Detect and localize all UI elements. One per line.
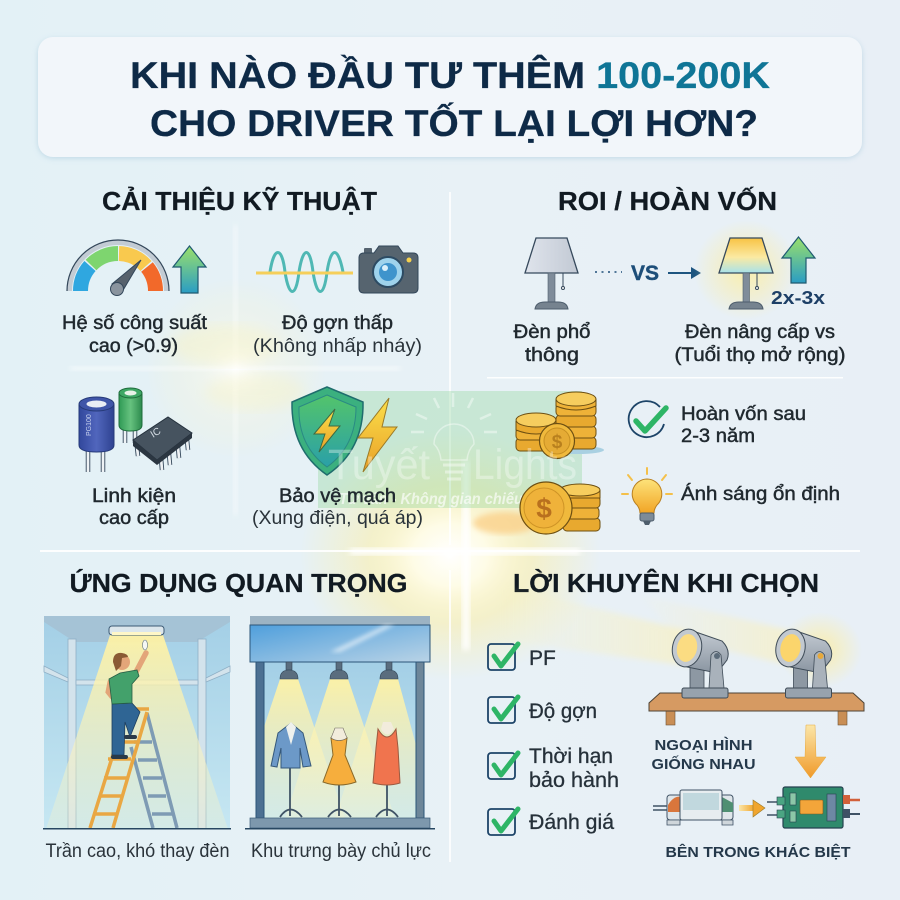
icon: coin stacks: $ xyxy=(552,432,563,453)
track lights xyxy=(280,662,398,679)
label: standard lamp: Đèn phổ xyxy=(514,322,590,343)
spotlight 2 xyxy=(772,626,832,698)
label: circuit protection: (Xung điện, quá áp) xyxy=(252,508,423,529)
text: payback: Hoàn vốn sau xyxy=(681,404,806,425)
icon: electronic components xyxy=(79,388,192,472)
title text: KHI NÀO ĐẦU TƯ THÊM 100-200K xyxy=(130,54,770,96)
icon: coin stacks xyxy=(516,392,604,458)
heading: LỜI KHUYÊN KHI CHỌN xyxy=(513,568,819,598)
title text xyxy=(130,54,770,144)
light glow: upper left cross xyxy=(70,225,400,515)
label: circuit protection xyxy=(252,486,423,529)
label: upgraded lamp: (Tuổi thọ mở rộng) xyxy=(674,345,846,366)
check: warranty: bảo hành xyxy=(529,769,619,792)
arrow: right xyxy=(739,800,765,817)
check: reviews: Đánh giá xyxy=(529,811,614,834)
mannequins xyxy=(271,722,400,817)
panel: ROI xyxy=(487,186,846,534)
heading: ROI / HOÀN VỐN xyxy=(558,186,777,216)
check: PF xyxy=(488,644,556,670)
icon: upgraded lamp xyxy=(694,220,798,320)
panel: cải thiện kỹ thuật xyxy=(62,186,423,529)
text: stable light: Ánh sáng ổn định xyxy=(681,484,840,505)
icon: light bulb xyxy=(622,468,672,525)
watermark logo: Tuyết xyxy=(328,441,430,489)
label: same appearance: NGOẠI HÌNH xyxy=(654,737,752,754)
label: power factor: Hệ số công suất xyxy=(62,313,208,334)
label: different inside: BÊN TRONG KHÁC BIỆT xyxy=(666,843,850,861)
label: components xyxy=(92,486,176,529)
person xyxy=(108,640,148,759)
heading: CẢI THIỆU KỸ THUẬT xyxy=(102,186,377,216)
label: same appearance: GIỐNG NHAU xyxy=(652,755,756,773)
illustration: high ceiling xyxy=(43,616,231,830)
heading: ỨNG DỤNG QUAN TRỌNG xyxy=(70,568,408,598)
caption: high ceiling: Trần cao, khó thay đèn xyxy=(46,841,230,862)
vs arrow: VS xyxy=(631,262,659,285)
spotlight 1 xyxy=(669,626,728,698)
label: upgraded lamp: Đèn nâng cấp vs xyxy=(685,322,835,343)
text: payback: 2-3 năm xyxy=(681,426,755,447)
icon: standard lamp xyxy=(525,238,578,309)
label: low ripple xyxy=(253,313,422,357)
icon: electronic components: IC xyxy=(149,426,163,441)
caption: showroom: Khu trưng bày chủ lực xyxy=(251,841,431,862)
label: components: Linh kiện xyxy=(92,486,176,507)
check: ripple xyxy=(488,697,597,723)
vs arrow xyxy=(595,262,701,285)
light glow: lower centre xyxy=(300,430,600,680)
label: standard lamp: thông xyxy=(525,345,579,366)
check: reviews xyxy=(488,809,614,835)
watermark logo xyxy=(328,393,577,489)
text: payback xyxy=(681,404,806,447)
label: low ripple: (Không nhấp nháy) xyxy=(253,336,422,357)
label: power factor: cao (>0.9) xyxy=(89,336,178,357)
label: circuit protection: Bảo vệ mạch xyxy=(279,486,396,507)
label: power factor xyxy=(62,313,208,357)
check: warranty: Thời hạn xyxy=(529,745,613,768)
arrow: down xyxy=(795,725,826,778)
ladder xyxy=(90,709,177,828)
check: PF: PF xyxy=(529,647,556,670)
section dividers xyxy=(40,192,860,862)
watermark background: Tư vấn - Không gian chiếu sáng xyxy=(339,491,561,508)
watermark background xyxy=(318,391,582,508)
watermark logo: Lights xyxy=(473,441,577,489)
panel: lời khuyên xyxy=(488,568,864,861)
icon: shield and bolts xyxy=(292,387,397,475)
icon: up arrow 2x-3x: 2x-3x xyxy=(771,288,825,308)
icon: payback check xyxy=(629,401,666,437)
spotlight beams xyxy=(500,585,862,688)
icon: cheap driver xyxy=(653,790,733,825)
title text: CHO DRIVER TỐT LẠI LỢI HƠN? xyxy=(150,102,758,144)
check: ripple: Độ gợn xyxy=(529,700,597,723)
title panel xyxy=(38,37,862,158)
icon: gold coins: $ xyxy=(536,493,552,524)
shelf with spotlights xyxy=(649,626,864,725)
icon: power factor gauge xyxy=(67,240,169,296)
icon: up arrow xyxy=(173,246,206,293)
icon: electronic components: PG100 xyxy=(86,414,93,436)
icon: camera xyxy=(359,246,418,293)
icon: ripple wave xyxy=(256,252,353,292)
icon: up arrow 2x-3x xyxy=(771,237,825,308)
label: low ripple: Độ gợn thấp xyxy=(282,313,393,334)
panel: ứng dụng quan trọng xyxy=(43,568,435,862)
icon: gold coins xyxy=(520,482,600,534)
illustration: showroom xyxy=(245,616,435,830)
checklist xyxy=(488,644,619,835)
label: components: cao cấp xyxy=(99,508,169,529)
icon: quality driver PCB xyxy=(767,787,860,828)
label: standard lamp xyxy=(514,322,590,366)
label: same appearance xyxy=(652,737,756,773)
label: upgraded lamp xyxy=(674,322,846,366)
check: warranty xyxy=(488,745,619,792)
